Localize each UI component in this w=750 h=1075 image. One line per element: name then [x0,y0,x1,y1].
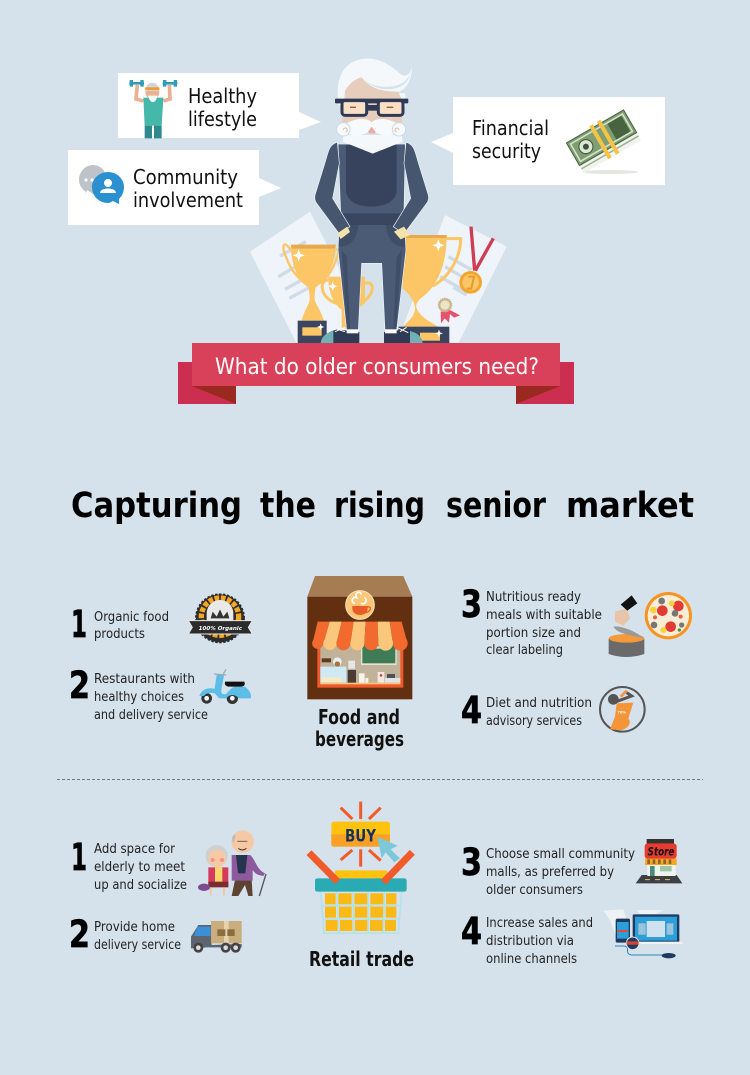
icon: online devices [603,909,683,958]
item 4: diet and nutrition advisory: Diet and nutrition [486,696,592,711]
speech bubble: community involvement [68,150,281,225]
item 1: space for elderly [71,830,266,896]
icon: nutrition bottle person [600,687,645,732]
icon: tin can and hand [609,595,644,657]
icon: bundle of dollars [563,107,655,198]
label: lifestyle [188,107,257,131]
icon: delivery truck [191,921,242,953]
icon: shopping basket with buy button: BUY [345,827,377,846]
hero illustration: older man with trophies [250,59,507,343]
speech bubble: healthy lifestyle [118,73,321,138]
icon: nutrition bottle person: 70% [617,710,626,714]
item 3: small community malls: malls, as preferred by [486,865,614,880]
item 1: space for elderly: up and socialize [94,878,187,893]
man head [335,59,412,154]
item 4: online channels: Increase sales and [486,916,593,931]
label: involvement [133,188,243,212]
item 3: nutritious ready meals: clear labeling [486,643,563,658]
item 4: online channels: distribution via [486,934,574,949]
certificates [250,212,507,343]
item 4: diet and nutrition advisory: advisory services [486,714,582,729]
item 2: home delivery: 2 [69,913,90,956]
item 3: nutritious ready meals: Nutritious ready [486,590,581,605]
item 3: nutritious ready meals [461,583,692,658]
title: senior [446,486,546,526]
icon: organic badge: 100% Organic [199,626,243,632]
label: Healthy [188,84,257,108]
icon: pizza [645,592,692,639]
item 2: restaurants with delivery: 2 [69,664,90,707]
item 2: restaurants with delivery: and delivery service [94,708,208,723]
item 2: home delivery [69,913,242,956]
label: Financial [472,116,549,140]
shoes [321,327,423,343]
trophy: left [283,244,339,343]
item 4: online channels: online channels [486,952,577,967]
item 2: restaurants with delivery: Restaurants with [94,672,195,687]
item 3: small community malls [461,839,682,898]
item 1: organic food products: Organic food [94,610,169,625]
item 1: organic food products: products [94,627,145,642]
man body [315,142,429,331]
item 4: online channels: 4 [461,910,482,953]
label: Community [133,165,238,189]
trophy: right [398,235,461,343]
icon: shopping basket with buy button [309,802,412,933]
icon: organic badge [188,594,252,642]
medal [459,227,493,294]
item 4: online channels [461,909,683,967]
item 4: diet and nutrition advisory [461,687,645,732]
rosette [438,298,460,323]
section: retail trade [69,802,683,971]
icon: chat bubbles [79,165,124,204]
item 2: home delivery: Provide home [94,920,175,935]
item 1: space for elderly: 1 [71,836,87,879]
icon: store [636,839,682,883]
icon: man lifting dumbbells [129,80,177,138]
item 4: diet and nutrition advisory: 4 [461,689,482,732]
item 2: restaurants with delivery: healthy choices [94,690,184,705]
title: rising [334,486,425,526]
item 2: restaurants with delivery [69,664,251,723]
icon: scooter [199,669,251,704]
item 3: nutritious ready meals: portion size and [486,626,581,641]
item 3: nutritious ready meals: meals with suitable [486,608,602,623]
icon: store: Store [648,844,675,858]
title: market [566,486,694,526]
item 1: organic food products [71,594,252,646]
item 3: nutritious ready meals: 3 [461,583,482,626]
item 3: small community malls: older consumers [486,883,583,898]
title: the [260,486,316,526]
icon: food shop [307,576,412,699]
speech bubble: financial security [431,97,665,198]
heading: food and beverages: Food and [318,705,400,729]
item 1: space for elderly: elderly to meet [94,860,185,875]
title: Capturing [71,486,242,526]
item 1: organic food products: 1 [71,603,87,646]
item 3: small community malls: Choose small community [486,847,635,862]
heading: retail trade: Retail trade [309,947,414,971]
trophy: middle [322,277,372,328]
icon: elderly couple [198,830,266,896]
item 2: home delivery: delivery service [94,938,181,953]
banner: what do older consumers need [178,343,574,404]
heading: food and beverages: beverages [315,727,404,751]
item 3: small community malls: 3 [461,841,482,884]
item 1: space for elderly: Add space for [94,842,176,857]
banner: what do older consumers need: What do older consumers need? [215,355,539,380]
label: security [472,139,541,163]
section: food and beverages [69,576,692,751]
